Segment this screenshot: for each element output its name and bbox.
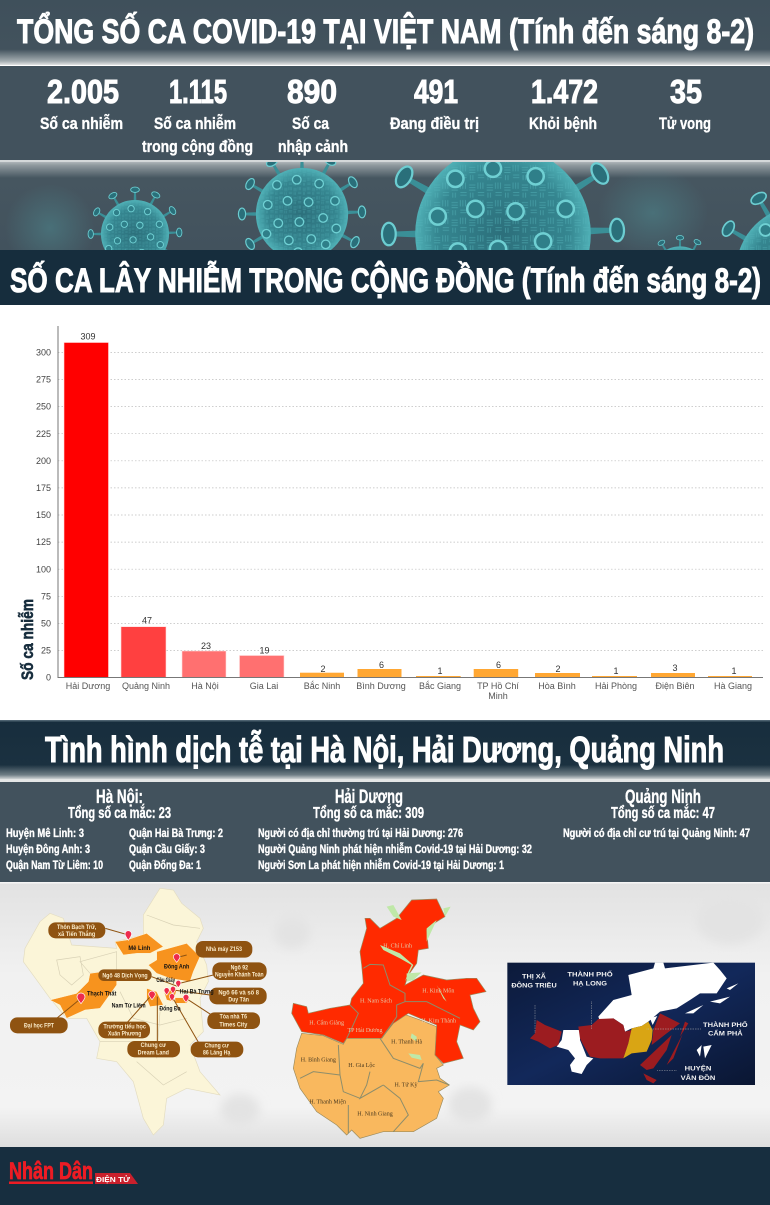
- location labels: Ngõ 66 và số 8: [218, 989, 259, 997]
- stat: tử vong: Tử vong: [659, 114, 711, 133]
- axis tick labels: 0: [46, 673, 51, 683]
- axis tick labels: 150: [36, 510, 51, 520]
- stat: tử vong: 35: [670, 73, 702, 110]
- stat: tử vong: [659, 73, 711, 133]
- axis tick labels: 200: [36, 456, 51, 466]
- Cẩm Phả district: [623, 1022, 653, 1058]
- virus illustrations: [18, 162, 770, 250]
- header band: national totals: [0, 0, 770, 250]
- section heading: community cases: [0, 250, 770, 305]
- stat: đang điều trị: Đang điều trị: [390, 114, 479, 133]
- column: Hà Nội: Huyện Mê Linh: 3: [6, 826, 84, 840]
- district borders: [300, 964, 460, 1133]
- bar value labels: 2: [555, 664, 561, 674]
- stat: tổng số ca nhiễm: 2.005: [47, 73, 119, 110]
- Hà Nội base shape: [23, 888, 220, 1135]
- leader lines: [535, 1002, 702, 1071]
- axis tick labels: 175: [36, 483, 51, 493]
- district names: H. Cẩm Giàng: [309, 1019, 344, 1026]
- district names: Đông Anh: [164, 964, 189, 971]
- axis tick labels: 125: [36, 537, 51, 547]
- column: Quảng Ninh: Quảng Ninh: [625, 787, 701, 808]
- location labels: [10, 922, 267, 1057]
- stat: nhập cảnh: [278, 73, 348, 156]
- bar chart: [18, 326, 763, 701]
- column: Hải Dương: Người Quảng Ninh phát hiện nhiễm Covid-19 tại Hải Dương: 32: [258, 841, 532, 856]
- location labels: Thôn Bạch Trữ,: [57, 924, 96, 931]
- stat: nhập cảnh: nhập cảnh: [278, 137, 348, 156]
- column: Hà Nội: Quận Cầu Giấy: 3: [129, 842, 205, 856]
- section heading: epidemiology: [0, 720, 770, 779]
- district names: H. Bình Giang: [301, 1058, 336, 1064]
- bar value labels: 309: [80, 332, 96, 342]
- axis tick labels: 25: [41, 646, 51, 656]
- district names: Nam Từ Liêm: [112, 1003, 146, 1010]
- highlighted districts: [50, 933, 200, 1018]
- district names: H. Chí Linh: [383, 943, 412, 949]
- map: Hải Dương: [292, 899, 486, 1138]
- low-risk districts: [293, 1013, 449, 1138]
- stat: trong cộng đồng: 1.115: [169, 73, 227, 110]
- y axis title: Số ca nhiễm: [18, 599, 37, 680]
- stat: đang điều trị: 491: [414, 73, 458, 110]
- location labels: Dream Land: [138, 1050, 169, 1057]
- place labels: ĐÔNG TRIỀU: [511, 979, 557, 989]
- stat: khỏi bệnh: 1.472: [531, 73, 598, 110]
- column: Quảng Ninh: [563, 787, 750, 840]
- place labels: THỊ XÃ: [522, 972, 546, 981]
- axis tick labels: 225: [36, 429, 51, 439]
- place labels: THÀNH PHỐ: [703, 1019, 748, 1029]
- place labels: [511, 969, 748, 1082]
- location labels: Ngõ 48 Dịch Vọng: [102, 972, 148, 979]
- district names: H. Gia Lộc: [348, 1063, 375, 1069]
- axes: [58, 326, 763, 678]
- location labels: Trường tiểu học: [103, 1022, 146, 1030]
- district names: Cầu Giấy: [156, 975, 175, 984]
- location labels: Times City: [219, 1021, 248, 1028]
- axis tick labels: 100: [36, 564, 51, 574]
- category labels: Quảng Ninh: [122, 681, 170, 691]
- district names: [87, 945, 214, 1012]
- stat: nhập cảnh: 890: [287, 73, 337, 110]
- category labels: Hòa Bình: [538, 681, 576, 691]
- district names: Hai Bà Trưng: [180, 988, 214, 995]
- stat: khỏi bệnh: Khỏi bệnh: [529, 114, 597, 133]
- category labels: Bình Dương: [356, 681, 406, 691]
- logo: Nhân Dân điện tử: ĐIỆN TỬ: [96, 1175, 131, 1184]
- bar value labels: 6: [379, 660, 384, 670]
- column: Hà Nội: Quận Đống Đa: 1: [129, 858, 201, 872]
- footer band: [0, 1147, 770, 1205]
- bar value labels: 1: [613, 666, 619, 676]
- place labels: HUYỆN: [685, 1063, 712, 1072]
- column: Quảng Ninh: Tổng số ca mắc: 47: [611, 804, 715, 822]
- category labels: Điện Biên: [655, 681, 695, 691]
- stat: trong cộng đồng: Số ca nhiễm: [154, 114, 236, 133]
- column: Hải Dương: Hải Dương: [335, 787, 403, 808]
- bar value labels: 47: [142, 616, 152, 626]
- district names: H. Kinh Môn: [422, 988, 454, 994]
- bar value labels: 2: [320, 664, 326, 674]
- category labels: Bắc Giang: [419, 681, 461, 691]
- category labels: Gia Lai: [250, 681, 278, 691]
- category labels: Hà Nội: [191, 681, 219, 691]
- location labels: Tòa nhà T6: [220, 1014, 247, 1021]
- logo: Nhân Dân điện tử: Nhân Dân: [9, 1158, 93, 1185]
- axis tick labels: 275: [36, 375, 51, 385]
- category labels: [66, 681, 752, 701]
- location labels: Nguyễn Khánh Toàn: [215, 969, 264, 978]
- location labels: Nhà máy Z153: [206, 946, 242, 953]
- axis tick labels: 300: [36, 348, 51, 358]
- bars: [64, 342, 752, 678]
- axis tick labels: 50: [41, 618, 51, 628]
- axis tick labels: 250: [36, 402, 51, 412]
- column: Hải Dương: Tổng số ca mắc: 309: [313, 804, 424, 822]
- district names: Mê Linh: [128, 945, 150, 952]
- district names: H. Tứ Kỳ: [395, 1082, 417, 1088]
- bar value labels: 6: [496, 660, 501, 670]
- district names: H. Ninh Giang: [357, 1111, 393, 1117]
- location labels: 86 Láng Hạ: [203, 1050, 231, 1057]
- category labels: Hải Dương: [66, 681, 110, 691]
- category labels: Hải Phòng: [595, 681, 637, 691]
- column: Hà Nội: Quận Hai Bà Trưng: 2: [129, 826, 223, 840]
- column: Hà Nội: Huyện Đông Anh: 3: [6, 842, 90, 856]
- map: Hà Nội: [10, 888, 267, 1135]
- location labels: Chung cư: [205, 1042, 229, 1049]
- location labels: Duy Tân: [228, 997, 249, 1004]
- location labels: Chung cư: [141, 1042, 166, 1049]
- district names: H. Nam Sách: [360, 998, 392, 1004]
- bar value labels: 1: [731, 666, 737, 676]
- stat: tổng số ca nhiễm: Số ca nhiễm: [40, 114, 123, 133]
- place labels: HẠ LONG: [573, 980, 607, 987]
- location labels: Đại học FPT: [24, 1022, 54, 1029]
- location labels: Xuân Phương: [108, 1031, 141, 1038]
- stat: nhập cảnh: Số ca: [292, 114, 329, 133]
- map: Quảng Ninh: [507, 963, 755, 1085]
- location labels: xã Tiến Thắng: [58, 929, 95, 938]
- red districts: [530, 1013, 688, 1083]
- district names: TP Hải Dương: [347, 1028, 383, 1034]
- axis tick labels: [36, 348, 51, 683]
- connector lines: [57, 928, 217, 1045]
- stat: khỏi bệnh: [529, 73, 598, 133]
- column: Hải Dương: Người có địa chỉ thường trú tại Hải Dương: 276: [258, 826, 463, 840]
- green patches: [380, 905, 451, 1060]
- district names: Đống Đa: [159, 1004, 181, 1012]
- column: Hà Nội: Quận Nam Từ Liêm: 10: [6, 858, 103, 872]
- district names: H. Thanh Miện: [309, 1100, 346, 1106]
- stat: trong cộng đồng: [142, 73, 253, 156]
- stat: tổng số ca nhiễm: [40, 73, 123, 133]
- statistics row: [40, 73, 711, 156]
- category labels: Minh: [488, 691, 508, 701]
- column: Hải Dương: Người Sơn La phát hiện nhiễm Covid-19 tại Hải Dương: 1: [258, 857, 504, 872]
- district names: H. Thanh Hà: [391, 1040, 422, 1046]
- bar value labels: 1: [437, 666, 443, 676]
- location pins: [77, 931, 189, 1004]
- bar value labels: 19: [259, 646, 270, 656]
- category labels: Bắc Ninh: [304, 681, 340, 691]
- district names: [301, 943, 456, 1117]
- place labels: THÀNH PHỐ: [567, 969, 613, 979]
- place labels: VÂN ĐỒN: [681, 1072, 716, 1082]
- bar value labels: 23: [201, 641, 211, 651]
- stat: trong cộng đồng: trong cộng đồng: [142, 137, 253, 156]
- bar value labels: [80, 332, 737, 676]
- column: Hà Nội: Hà Nội:: [96, 787, 143, 808]
- column: Hải Dương: [258, 787, 532, 872]
- category labels: Hà Giang: [714, 681, 752, 691]
- panel: maps background: [0, 882, 770, 1147]
- category labels: TP Hồ Chí: [477, 681, 519, 691]
- bar value labels: 3: [672, 663, 678, 673]
- column: Hà Nội: Tổng số ca mắc: 23: [68, 804, 171, 822]
- panel: regional details: [0, 779, 770, 882]
- white land: [557, 963, 738, 1074]
- high-risk districts: [292, 899, 486, 1063]
- district names: Thạch Thất: [87, 990, 117, 998]
- location labels: Ngõ 92: [231, 964, 248, 971]
- axis tick labels: 75: [41, 591, 51, 601]
- stat: đang điều trị: [390, 73, 479, 133]
- district names: H. Kim Thành: [421, 1019, 456, 1025]
- column: Hà Nội: [6, 787, 223, 872]
- place labels: CẨM PHẢ: [708, 1028, 743, 1037]
